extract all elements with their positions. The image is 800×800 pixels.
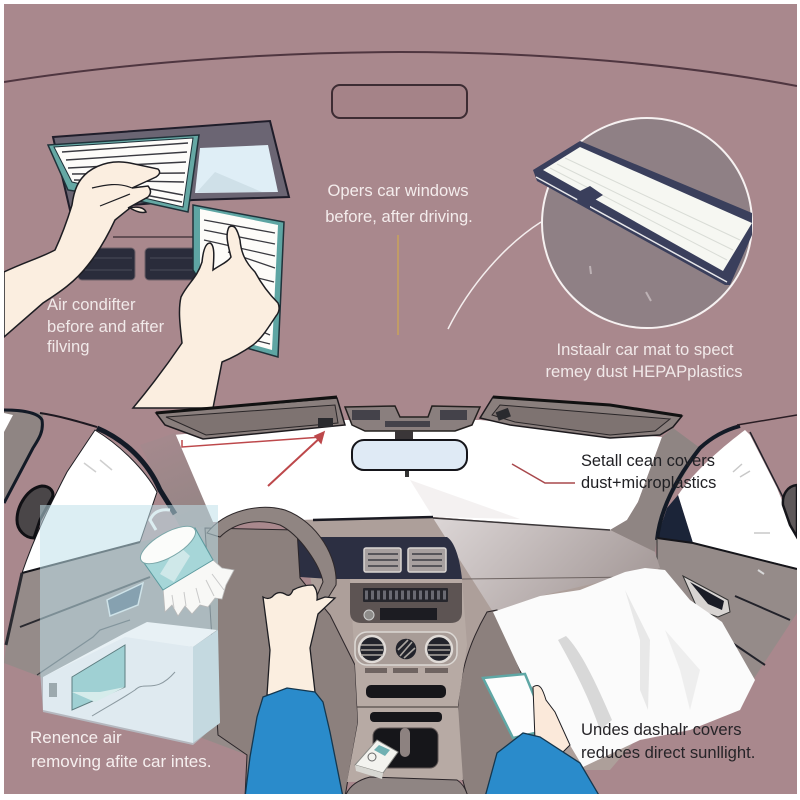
- panel: HEPA filter circle: [448, 118, 752, 381]
- divider line under caption: [397, 235, 399, 335]
- phone: [483, 674, 548, 738]
- caption: seat covers: Setall cean covers: [581, 452, 715, 470]
- passenger hand: [533, 685, 570, 760]
- right sun visor: [480, 397, 682, 438]
- right pillar: [610, 428, 700, 552]
- open filter right: [193, 205, 284, 357]
- caption: HEPA filter: Instaalr car mat to spect: [556, 340, 734, 359]
- right side window: [657, 415, 797, 568]
- dashboard cover cloth: [493, 568, 755, 767]
- hand holding left filter: [4, 162, 160, 337]
- connector curve: [448, 222, 541, 329]
- console lid: [346, 776, 468, 794]
- passenger knee panel: [458, 609, 534, 794]
- caption: HEPA filter: remey dust HEPAPplastics: [545, 362, 743, 381]
- caption: seat covers: [581, 452, 716, 492]
- roof line: [4, 52, 797, 86]
- passenger sleeve: [485, 733, 600, 797]
- caption: remove odors: [30, 728, 211, 771]
- dashboard vents: [78, 237, 200, 280]
- left rear quarter window: [4, 410, 97, 503]
- faint light wedge on windshield: [410, 480, 520, 519]
- left wing mirror: [17, 486, 53, 538]
- red arrow lines: [182, 432, 575, 486]
- caption: remove odors: Renence air: [30, 728, 122, 747]
- rear-view mirror outline: [332, 85, 467, 118]
- open filter left: [48, 135, 199, 212]
- caption: air filter: Air condifter: [47, 295, 136, 314]
- windshield: [173, 420, 662, 530]
- overhead console: [345, 406, 480, 431]
- caption: remove odors: removing afite car intes.: [31, 752, 211, 771]
- caption: open windows: Opers car windows: [327, 181, 469, 200]
- brush: [135, 510, 234, 616]
- dashboard: [298, 516, 660, 770]
- steering wheel: [206, 506, 337, 599]
- panel: car interior: [4, 397, 797, 797]
- left pillar: [150, 434, 214, 528]
- caption: dashboard covers: [581, 720, 755, 762]
- caption: seat covers: dust+microplastics: [581, 474, 716, 492]
- center console: [347, 579, 467, 782]
- caption: open windows: before, after driving.: [325, 207, 473, 226]
- left door: [4, 526, 247, 755]
- air purifier box: [43, 622, 220, 743]
- driver sleeve: [245, 688, 343, 797]
- caption: air filter: before and after: [47, 317, 165, 336]
- caption: dashboard covers: reduces direct sunllight.: [581, 743, 755, 762]
- caption: air filter: [47, 295, 165, 356]
- hand holding right filter: [133, 226, 279, 408]
- interior rear-view mirror: [352, 431, 467, 477]
- panel: air filter replacement hands: [4, 121, 289, 408]
- left sun visor: [156, 397, 345, 439]
- magnifier circle: [542, 118, 752, 328]
- caption: dashboard covers: Undes dashalr covers: [581, 720, 742, 739]
- driver column panel: [205, 528, 358, 797]
- driver hand: [263, 585, 335, 695]
- remote device: [355, 740, 398, 779]
- caption: open windows: [325, 181, 473, 226]
- caption: air filter: filving: [47, 337, 89, 356]
- cabin filter: [533, 141, 752, 285]
- right door: [657, 538, 797, 680]
- caption: HEPA filter: [545, 340, 743, 381]
- right wing mirror: [783, 485, 797, 537]
- sun visor panel: [53, 121, 289, 210]
- left side window: [22, 428, 175, 573]
- window door overlay with box and brush: [30, 505, 234, 771]
- air vents: [364, 548, 446, 572]
